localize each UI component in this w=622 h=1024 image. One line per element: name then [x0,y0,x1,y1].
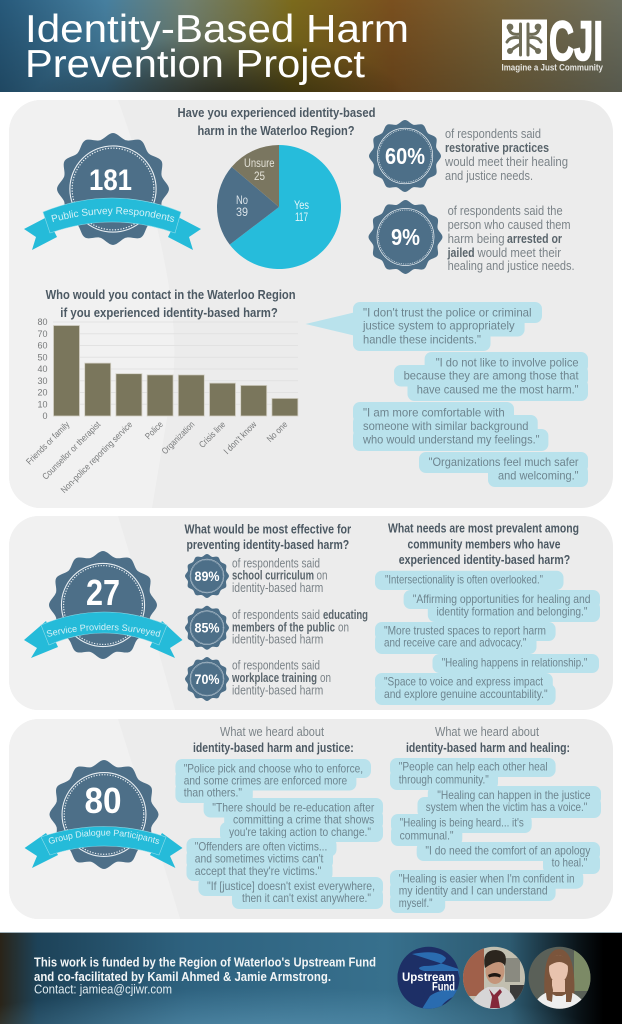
stat: 9 percent arrested or jailed: arrested or [507,232,562,246]
logo: CJI: Imagine a Just Community [502,62,604,74]
quote bubble: justice everywhere: then it can't exist anywhere." [242,891,371,905]
quote bubble: affirming opportunities: identity formation and belonging." [436,605,588,619]
quote bubble: do not trust police [306,302,542,351]
badge: 80 group dialogue participants: Group Dialogue Participants [48,830,160,844]
quote bubble: involve police: because they are among those that [404,369,579,383]
badge: 80 group dialogue participants: 80 [84,780,122,821]
quote bubble: justice everywhere: "If [justice] doesn't exist everywhere, [207,879,375,893]
quote bubble: confident in identity: myself." [399,896,432,910]
quote bubble: heal through community: through community." [399,772,489,786]
quote bubble: confident in identity: "Healing is easier when I'm confident in [399,872,575,886]
pie chart: No [236,193,248,207]
stat: 85 percent educating the public: identity-based harm [232,633,323,647]
badge: 181 public survey respondents: 181 [89,164,132,197]
funding text [34,954,376,996]
bar chart: Non-police reporting service [59,419,134,495]
logo: Upstream Fund [397,946,462,1012]
bar chart: 0 [42,411,48,421]
quote bubble: heal through community: "People can help each other heal [399,760,548,774]
quote bubble: organizations: "Organizations feel much safer [429,455,579,469]
heading: most effective [184,522,351,552]
quote bubble: justice everywhere [198,877,383,909]
pie chart: Yes [294,198,309,212]
stat: 9 percent arrested or jailed: harm being [448,232,505,246]
quote bubble: voice and accountability [375,673,556,705]
pie chart [217,145,341,269]
quote bubble: involve police: have caused me the most harm." [417,382,579,396]
heading: harm and justice: What we heard about [220,724,324,739]
heading: most effective: preventing identity-based harm? [186,537,349,552]
bar chart: Counsellor or therapist [40,419,103,482]
quote bubble: voice and accountability: and explore genuine accountability." [384,687,548,701]
bar chart: 70 [37,329,48,339]
header banner [0,0,622,92]
logo: Upstream Fund: Fund [432,982,455,994]
logo: Upstream Fund: Upstream [402,972,455,984]
heading: prevalent needs: community members who have [408,536,560,552]
quote bubble: involve police: "I do not like to involve police [436,355,579,369]
badge: 181 public survey respondents: Public Survey Respondents [51,207,174,222]
heading: harm and healing [406,724,570,755]
bar chart: 60 [37,340,48,350]
bar chart: Friends or family [24,419,72,467]
pie chart: 25 [254,169,265,183]
stat: 85 percent educating the public [185,606,368,650]
stat: 9 percent arrested or jailed: person who caused them [448,218,571,232]
footer band [0,932,622,1024]
quote bubble: justice system voice: system when the victim has a voice." [426,800,587,814]
funding text: and co-facilitated by Kamil Ahmed & Jamie Armstrong. [34,969,331,984]
stat: 9 percent arrested or jailed [368,200,575,274]
bar chart [24,317,298,495]
badge: 27 service providers surveyed: Service Providers Surveyed [46,623,161,637]
bar chart: 30 [37,376,48,386]
quote bubble: offenders are victims: "Offenders are often victims... [195,840,327,854]
quote bubble: offenders are victims [186,838,336,881]
stat: 70 percent workplace training [185,657,331,701]
quote bubble: police pick and choose [175,759,371,803]
stat: 70 percent workplace training: 70% [194,671,220,687]
logo: CJI [502,9,604,74]
quote bubble: comfort of an apology: to heal." [552,856,587,870]
title [25,8,409,86]
stat: 89 percent school curriculum: school curriculum [232,569,314,583]
quote bubble: affirming opportunities: "Affirming opportunities for healing and [413,592,590,606]
photo: Kamil Ahmed [463,946,525,1010]
stat: 9 percent arrested or jailed: would meet their [477,246,561,260]
quote bubble: organizations: and welcoming." [498,469,579,483]
quote bubble: do not trust police: "I don't trust the police or criminal [363,305,532,319]
quote bubble: justice system voice: "Healing can happen in the justice [437,788,591,802]
stat: 85 percent educating the public: members of the public [232,620,335,634]
quote bubble: healing in relationship: "Healing happens in relationship." [442,655,587,669]
heading: prevalent needs: What needs are most prevalent among [388,520,579,536]
stat: 9 percent arrested or jailed: 9% [391,224,420,250]
panel: service providers [9,516,613,710]
quote bubble: police pick and choose: than others." [184,786,242,800]
funding text: This work is funded by the Region of Waterloo's Upstream Fund [34,954,376,970]
heading: who would you contact [46,287,296,320]
quote bubble: comfortable with similar background: who would understand my feelings." [362,433,540,447]
stat: 60 percent restorative practices: would meet their healing [444,155,568,169]
stat: 70 percent workplace training: workplace training [231,671,317,685]
quote bubble: voice and accountability: "Space to voice and express impact [384,675,544,689]
quote bubble: affirming opportunities [404,590,600,622]
quote bubble: heal through community [390,758,556,790]
bar chart: 20 [37,388,48,398]
stat: 9 percent arrested or jailed: healing and justice needs. [448,259,575,273]
quote bubble: trusted spaces: "More trusted spaces to report harm [384,624,546,638]
quote bubble: re-education: you're taking action to change." [229,825,371,839]
quote bubble: re-education: committing a crime that shows [233,813,374,827]
quote bubble: justice system voice [418,786,601,818]
heading: harm and healing: What we heard about [435,724,539,739]
heading: have you experienced: Have you experienced identity-based [178,105,376,120]
heading: harm and healing: identity-based harm and healing: [406,740,570,755]
quote bubble: offenders are victims: and sometimes victims can't [195,852,324,866]
pie chart: 117 [295,210,308,224]
quote bubble: police pick and choose: "Police pick and choose who to enforce, [184,761,363,775]
stat: 60 percent restorative practices: and justice needs. [445,169,533,183]
stat: 85 percent educating the public: 85% [194,620,220,636]
bar chart: 10 [37,399,48,409]
quote bubble: intersectionality: "Intersectionality is often overlooked." [385,572,543,586]
stat: 60 percent restorative practices: restorative practices [445,141,549,155]
stat: 70 percent workplace training: on [320,671,331,685]
quote bubble: trusted spaces: and receive care and advocacy." [384,636,526,650]
heading: most effective: What would be most effective for [184,522,351,536]
heading: who would you contact: Who would you contact in the Waterloo Region [46,287,296,302]
badge: 181 public survey respondents [24,133,201,250]
funding text: Contact: jamiea@cjiwr.com [34,982,172,996]
panel: public survey [9,100,613,508]
quote bubble: comfortable with similar background: "I am more comfortable with [363,405,505,419]
quote bubble: re-education [204,798,383,842]
badge: 80 group dialogue participants [24,760,182,869]
stat: 9 percent arrested or jailed: of respondents said the [448,204,563,218]
quote bubble: confident in identity [390,870,583,913]
stat: 85 percent educating the public: on [338,620,349,634]
heading: prevalent needs: experienced identity-based harm? [399,552,570,567]
pie chart: 39 [236,205,248,219]
quote bubble: comfort of an apology: "I do need the comfort of an apology [425,844,590,858]
quote bubble: involve police [394,352,588,401]
title: Identity-Based Harm [25,8,409,51]
stat: 60 percent restorative practices [369,120,568,192]
stat: 70 percent workplace training: of respondents said [232,659,320,673]
quote bubble: being heard [391,814,532,846]
bar chart: No one [265,419,289,444]
badge: 27 service providers surveyed [24,551,182,659]
stat: 89 percent school curriculum: identity-based harm [232,581,323,595]
quote bubble: trusted spaces [375,622,556,654]
quote bubble: do not trust police: justice system to appropriately [362,319,515,333]
quote bubble: comfortable with similar background: someone with similar background [363,419,528,433]
stat: 89 percent school curriculum: of respondents said [232,556,320,570]
quote bubble: offenders are victims: accept that they're victims." [195,864,321,878]
bar chart: Crisis line [197,419,227,450]
heading: harm and justice [193,724,354,755]
bar chart: Police [143,419,165,441]
bar chart: 40 [37,364,48,374]
quote bubble: being heard: "Healing is being heard... it's [400,816,524,830]
stat: 85 percent educating the public: of respondents said [232,608,320,622]
quote bubble: intersectionality [375,571,564,590]
stat: 60 percent restorative practices: 60% [385,143,425,169]
badge: 27 service providers surveyed: 27 [86,572,120,613]
stat: 89 percent school curriculum: 89% [194,568,220,584]
stat: 70 percent workplace training: identity-based harm [232,683,323,697]
heading: prevalent needs [388,520,579,567]
stat: 60 percent restorative practices: of respondents said [445,127,541,141]
heading: harm and justice: identity-based harm and justice: [193,740,354,755]
bar chart: 80 [37,317,48,327]
bar chart: 50 [37,352,48,362]
heading: who would you contact: if you experienced identity-based harm? [60,305,278,320]
pie chart: Unsure [244,156,275,170]
quote bubble: healing in relationship [432,654,599,673]
photo: Jamie Armstrong [528,946,591,1012]
quote bubble: organizations [419,452,588,487]
quote bubble: police pick and choose: and some crimes are enforced more [184,773,347,787]
quote bubble: comfort of an apology [417,842,600,874]
stat: 85 percent educating the public: educating [323,608,368,622]
quote bubble: comfortable with similar background [353,402,548,451]
quote bubble: re-education: "There should be re-education after [212,800,374,814]
stat: 89 percent school curriculum [185,554,328,598]
panel: group dialogue [9,719,613,919]
heading: have you experienced: harm in the Waterloo Region? [198,123,355,138]
title: Prevention Project [25,43,365,86]
stat: 9 percent arrested or jailed: jailed [447,246,475,260]
bar chart: Organization [160,419,196,456]
quote bubble: do not trust police: handle these incidents." [363,332,481,346]
quote bubble: confident in identity: my identity and I can understand [399,884,548,898]
quote bubble: being heard: communal." [400,828,454,842]
bar chart: I don't know [222,419,259,456]
heading: have you experienced [178,105,376,138]
stat: 89 percent school curriculum: on [316,569,328,583]
